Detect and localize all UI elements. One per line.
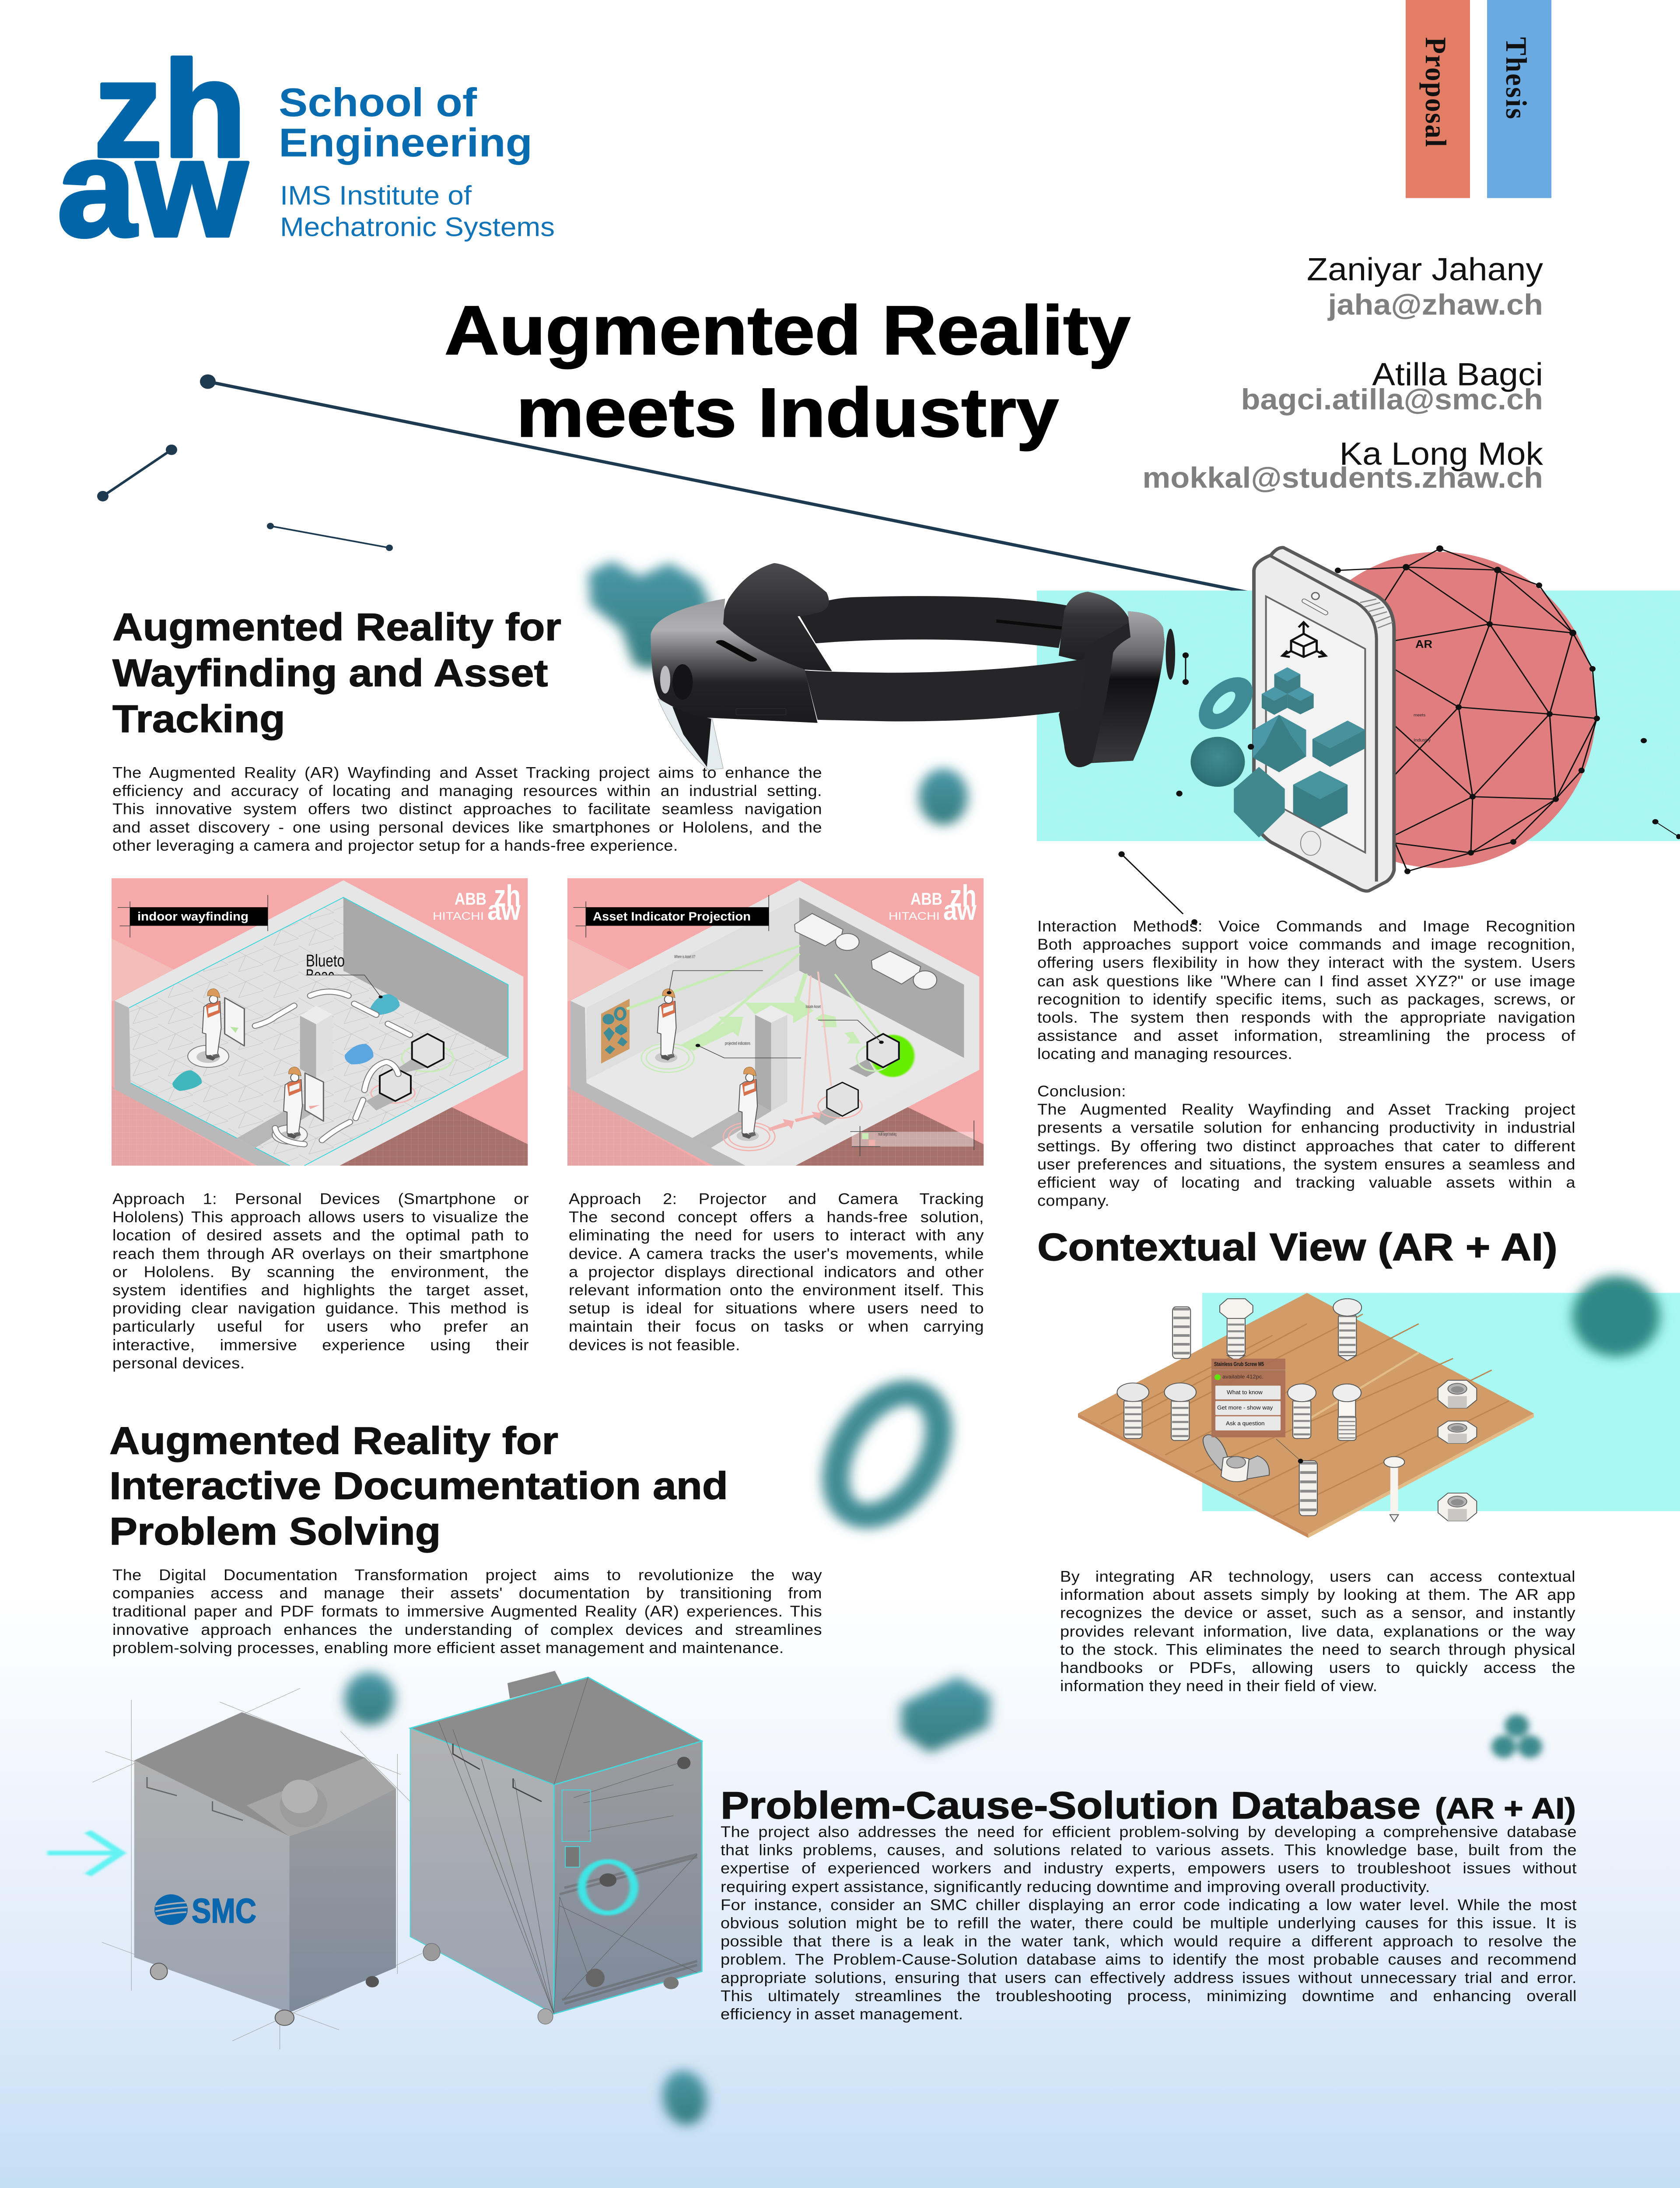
text: interaction methods: assistance and asset information, streamlining the process of — [1037, 1027, 1575, 1045]
AR info card: Get more - show way — [1217, 1404, 1273, 1411]
heading: contextual view: Contextual View (AR + AI) — [1037, 1225, 1558, 1269]
text: approach 1: interactive, immersive experience using their — [112, 1336, 529, 1353]
text: problem cause solution: that links problems, causes, and solutions related to various assets. This knowledge base, built from the — [721, 1842, 1577, 1859]
text: approach 1: reach them through AR overlays on their smartphone — [112, 1245, 529, 1262]
scattered dots and thin lines — [1119, 652, 1680, 925]
institute name: Mechatronic Systems — [280, 213, 555, 242]
beacons — [172, 994, 400, 1091]
room walls and floor — [112, 878, 528, 1166]
decorative blurred teal blob: sphere — [344, 1672, 395, 1725]
heading: documentation section: Problem Solving — [109, 1509, 441, 1553]
panel: AR phone and sphere illustration — [1037, 545, 1680, 925]
text: contextual view: information about assets simply by looking at them. The AR app — [1060, 1587, 1575, 1603]
text: wayfinding intro: This innovative system offers two distinct approaches to facilitate seamless navigation — [112, 801, 822, 818]
text: interaction methods — [1037, 918, 1575, 1063]
text: approach 1: system identifies and highlights the target asset, — [112, 1282, 529, 1299]
red polyhedral sphere: meets — [1414, 713, 1425, 718]
author: Ka Long Mok: Ka Long Mok — [1339, 436, 1543, 472]
room walls and floor — [567, 878, 984, 1166]
label: indoor wayfinding — [130, 907, 268, 926]
text: approach 1: Approach 1: Personal Devices (Smartphone or — [112, 1191, 529, 1208]
bottom cube — [1293, 771, 1348, 828]
panel: asset indicator projection room: multi target tracking — [878, 1132, 896, 1137]
text: problem cause solution: obvious solution might be to refill the water, there could be multiple underlying causes for this issue. It is — [721, 1915, 1577, 1932]
projected beams and arrows — [626, 944, 882, 1051]
AR info card: What to know — [1227, 1389, 1263, 1396]
panel: contextual view illustration — [1078, 1276, 1680, 1538]
text: approach 2: eliminating the need for users to interact with any — [569, 1227, 984, 1244]
heading: wayfinding section: Tracking — [112, 697, 285, 740]
text: approach 2: devices is not feasible. — [569, 1336, 740, 1353]
tab: Thesis: Thesis — [1499, 37, 1532, 119]
AR info card — [1211, 1359, 1285, 1437]
logo: ABB Hitachi zhaw: zh — [494, 879, 521, 913]
author: Zaniyar Jahany: Zaniyar Jahany — [1307, 251, 1543, 287]
decorative blurred teal tri-lobe — [1491, 1715, 1542, 1758]
AR info card: available 412pc. — [1222, 1374, 1264, 1380]
text: problem cause solution: appropriate solutions, ensuring that users can effectively address issues without unnecessary trial and error. — [721, 1970, 1577, 1987]
asset boxes — [366, 1034, 453, 1111]
label: bluetooth beacon: Blueto — [306, 951, 345, 970]
panel: asset indicator projection room — [567, 878, 984, 1166]
text: contextual view: recognizes the device or asset, such as a sensor, and instantly — [1060, 1605, 1575, 1622]
text: digital documentation: innovative approach enhances the understanding of complex devices and streamlines — [112, 1621, 822, 1638]
connector lines — [97, 374, 1251, 593]
red polyhedral sphere: AR — [1415, 638, 1432, 650]
cyan highlight ring — [582, 1862, 634, 1913]
logo: ABB Hitachi zhaw: aw — [943, 895, 976, 926]
email: jaha@zhaw.ch: jaha@zhaw.ch — [1328, 289, 1543, 321]
tiny annotations: locate Asset — [806, 1004, 821, 1010]
heading: wayfinding section: Augmented Reality for — [112, 605, 561, 649]
sphere — [1190, 737, 1245, 787]
heading: documentation section: Interactive Documentation and — [109, 1464, 728, 1508]
SMC logo: SMC — [192, 1891, 256, 1930]
text: approach 2: Approach 2: Projector and Camera Tracking — [569, 1191, 984, 1208]
text: approach 2: The second concept offers a hands-free solution, — [569, 1209, 984, 1226]
heading: problem cause solution database: Problem-Cause-Solution Database — [721, 1784, 1421, 1827]
text: conclusion: company. — [1037, 1192, 1110, 1210]
heading: wayfinding section — [112, 605, 561, 740]
heading: problem cause solution database: (AR + AI) — [1435, 1792, 1576, 1825]
text: interaction methods: can ask questions like "Where can I find asset XYZ?" or use image — [1037, 973, 1575, 990]
tiny annotations: projected indicators — [725, 1041, 750, 1046]
logo mark zh aw — [57, 33, 248, 266]
text: wayfinding intro: The Augmented Reality (AR) Wayfinding and Asset Tracking project aims to enhance the — [112, 764, 822, 782]
tiny annotations: Where is Asset X? — [674, 954, 695, 959]
author: Atilla Bagci: Atilla Bagci — [1372, 356, 1543, 392]
label: bluetooth beacon: Beac — [306, 965, 334, 985]
text: contextual view: handbooks or PDFs, allowing users to quickly access the — [1060, 1659, 1575, 1676]
logo: ABB Hitachi zhaw: HITACHI — [889, 910, 940, 922]
text: approach 1: location of desired assets and the optimal path to — [112, 1227, 529, 1244]
text: approach 2: maintain their focus on tasks or when carrying — [569, 1318, 984, 1336]
logo: ABB Hitachi zhaw: ABB — [910, 889, 942, 908]
text: interaction methods: locating and managing resources. — [1037, 1046, 1292, 1062]
decorative blurred teal blob: top cluster — [588, 561, 711, 670]
text: approach 1: particularly useful for users who prefer an — [112, 1318, 529, 1336]
label: bluetooth beacon — [307, 954, 344, 975]
AR info card: Stainless Grub Screw M5 — [1214, 1361, 1264, 1367]
label: indoor wayfinding: indoor wayfinding — [137, 910, 248, 923]
logo: ABB Hitachi zhaw: aw — [487, 895, 521, 926]
text: approach 2: setup is ideal for situations where users need to — [569, 1300, 984, 1317]
text: problem cause solution — [721, 1823, 1577, 2024]
logo: ABB Hitachi zhaw: ABB — [455, 889, 486, 908]
wooden board — [1078, 1293, 1534, 1538]
text: contextual view: information they need in their field of view. — [1060, 1678, 1378, 1695]
right ear piece — [1059, 592, 1175, 767]
logo mark zh aw: zh — [94, 33, 247, 186]
logo: ABB Hitachi zhaw — [889, 879, 976, 926]
text: wayfinding intro — [112, 764, 822, 855]
logo: zhaw School of Engineering — [57, 33, 555, 266]
top cushion — [723, 563, 832, 671]
text: approach 2: device. A camera tracks the user's movements, while — [569, 1245, 984, 1262]
logo: ABB Hitachi zhaw — [433, 879, 521, 926]
illustration: SMC chiller rendered — [47, 1688, 702, 2049]
decorative blurred teal cuboid — [901, 1676, 991, 1753]
visor body — [651, 599, 818, 723]
title: Augmented Reality — [444, 292, 1130, 369]
text: digital documentation: problem-solving processes, enabling more efficient asset management and maintenance. — [112, 1640, 784, 1657]
text: conclusion: efficient way of locating and tracking valuable assets within a — [1037, 1174, 1575, 1191]
text: problem cause solution: possible that there is a leak in the water tank, which would require a different approach to resolve the — [721, 1933, 1577, 1950]
text: contextual view — [1060, 1568, 1575, 1696]
worker one with phone — [188, 989, 244, 1067]
projectors and cameras — [794, 913, 937, 989]
label: asset indicator projection: Asset Indicator Projection — [593, 910, 751, 923]
email: bagci.atilla@smc.ch: bagci.atilla@smc.ch — [1241, 384, 1543, 416]
text: approach 1: personal devices. — [112, 1355, 245, 1372]
AR info card: Ask a question — [1226, 1420, 1264, 1427]
teal background — [1202, 1293, 1680, 1511]
SMC logo — [154, 1891, 256, 1930]
decorative blurred teal torus — [815, 1377, 960, 1532]
text: conclusion: presents a versatile solution for enhancing productivity in industrial — [1037, 1119, 1575, 1136]
text: approach 2 — [569, 1190, 984, 1354]
logo: ABB Hitachi zhaw: zh — [950, 879, 976, 913]
cabinet body — [92, 1688, 702, 2049]
text: problem cause solution: problem. The Problem-Cause-Solution database aims to identify the most probable causes and recommend — [721, 1951, 1577, 1968]
illustration: AR headset — [651, 563, 1175, 770]
cyan arrow — [47, 1832, 121, 1875]
email: mokkal@students.zhaw.ch: mokkal@students.zhaw.ch — [1142, 462, 1543, 494]
main strap — [805, 659, 1086, 722]
red polyhedral sphere — [1283, 545, 1600, 874]
text: interaction methods: tools. The system then responds with the appropriate navigation — [1037, 1009, 1575, 1026]
text: interaction methods: recognition to identify specific items, such as packages, screws, or — [1037, 991, 1575, 1008]
wall board with teal shapes — [601, 999, 630, 1063]
text: digital documentation: traditional paper and PDF formats to immersive Augmented Reality (AR) experiences. This — [112, 1603, 822, 1620]
text: problem cause solution: requiring expert assistance, significantly reducing downtime and improving overall productivity. — [721, 1879, 1430, 1895]
text: conclusion: user preferences and situations, the system ensures a seamless and — [1037, 1156, 1575, 1173]
heading: wayfinding section: Wayfinding and Asset — [112, 651, 548, 694]
text: approach 1: providing clear navigation guidance. This method is — [112, 1300, 529, 1317]
text: contextual view: By integrating AR technology, users can access contextual — [1060, 1568, 1575, 1585]
heading: documentation section — [109, 1419, 728, 1553]
heading: documentation section: Augmented Reality for — [109, 1419, 558, 1462]
text: approach 1 — [112, 1190, 529, 1373]
red polyhedral sphere: Industry — [1414, 738, 1431, 743]
text: digital documentation — [112, 1566, 822, 1658]
teal background — [1037, 591, 1680, 841]
workers — [641, 989, 775, 1150]
second asset — [812, 1082, 862, 1125]
title — [444, 292, 1130, 452]
text: approach 1: or Hololens. By scanning the environment, the — [112, 1264, 529, 1281]
text: problem cause solution: expertise of experienced workers and industry experts, empowers users to troubleshoot issues without — [721, 1860, 1577, 1877]
tracking legend — [850, 1121, 974, 1156]
glass visor — [658, 699, 723, 770]
tab: Thesis — [1487, 0, 1551, 198]
text: interaction methods: Both approaches support voice commands and image recognition, — [1037, 936, 1575, 953]
text: wayfinding intro: other leveraging a camera and projector setup for a hands-free experience. — [112, 837, 678, 854]
text: digital documentation: The Digital Documentation Transformation project aims to revolutionize the way — [112, 1567, 822, 1584]
institute name: IMS Institute of — [280, 181, 472, 210]
torus — [1188, 668, 1263, 739]
text: problem cause solution: The project also addresses the need for efficient problem-solving by developing a comprehensive database — [721, 1824, 1577, 1841]
tiny annotations — [674, 954, 896, 1137]
text: conclusion: The Augmented Reality Wayfinding and Asset Tracking project — [1037, 1101, 1575, 1118]
text: approach 2: a projector displays directional indicators and other — [569, 1264, 984, 1281]
highlighted asset — [849, 1034, 914, 1077]
institute name — [280, 181, 555, 242]
text: digital documentation: companies access and manage their assets' documentation by transitioning from — [112, 1585, 822, 1602]
text: conclusion — [1037, 1083, 1575, 1210]
text: problem cause solution: This ultimately streamlines the troubleshooting process, minimizing downtime and enhancing overall — [721, 1988, 1577, 2005]
tab: Proposal — [1406, 0, 1470, 198]
text: conclusion: Conclusion: — [1037, 1083, 1126, 1100]
text: problem cause solution: For instance, consider an SMC chiller displaying an error code indicating a low water level. While the most — [721, 1897, 1577, 1914]
rear head band — [799, 596, 1068, 648]
teal 3D shapes — [1188, 667, 1365, 838]
bottom gem — [1234, 767, 1285, 838]
illustration: SMC chiller wireframe — [410, 1671, 702, 2024]
label: asset indicator projection — [586, 907, 769, 926]
text: interaction methods: offering users flexibility in how they interact with the system. Users — [1037, 954, 1575, 971]
blurred teal blob — [1572, 1276, 1660, 1357]
cube cluster — [1262, 667, 1314, 715]
decorative blurred teal blob: hexagon — [919, 768, 968, 825]
text: approach 2: relevant information onto the environment itself. This — [569, 1282, 984, 1299]
school name: Engineering — [279, 120, 532, 165]
text: contextual view: to the stock. This eliminates the need to search through physical — [1060, 1641, 1575, 1658]
tab: Proposal: Proposal — [1419, 37, 1452, 147]
text: wayfinding intro: and asset discovery - one using personal devices like smartphones or Hololens, and the — [112, 819, 822, 836]
worker two with phone — [272, 1067, 323, 1144]
text: conclusion: settings. By offering two distinct approaches that cater to different — [1037, 1138, 1575, 1155]
gem — [1253, 715, 1306, 772]
text: problem cause solution: efficiency in asset management. — [721, 2006, 963, 2023]
title: meets Industry — [516, 374, 1059, 452]
school name — [279, 80, 532, 165]
school name: School of — [279, 80, 477, 125]
text: approach 1: Hololens) This approach allows users to visualize the — [112, 1209, 529, 1226]
logo mark zh aw: aw — [57, 111, 248, 266]
logo: ABB Hitachi zhaw: HITACHI — [433, 910, 484, 922]
smartphone — [1254, 547, 1394, 891]
text: contextual view: provides relevant information, live data, explanations or the way — [1060, 1623, 1575, 1640]
screws — [1117, 1299, 1477, 1522]
wayfinding arrows — [255, 992, 410, 1144]
text: interaction methods: Interaction Methods: Voice Commands and Image Recognition — [1037, 918, 1575, 935]
panel: indoor wayfinding room — [112, 878, 528, 1166]
text: wayfinding intro: efficiency and accuracy of locating and managing resources within an industrial setting. — [112, 783, 822, 799]
decorative blurred teal blob: bottom — [659, 2068, 710, 2128]
cuboid — [1312, 721, 1365, 767]
